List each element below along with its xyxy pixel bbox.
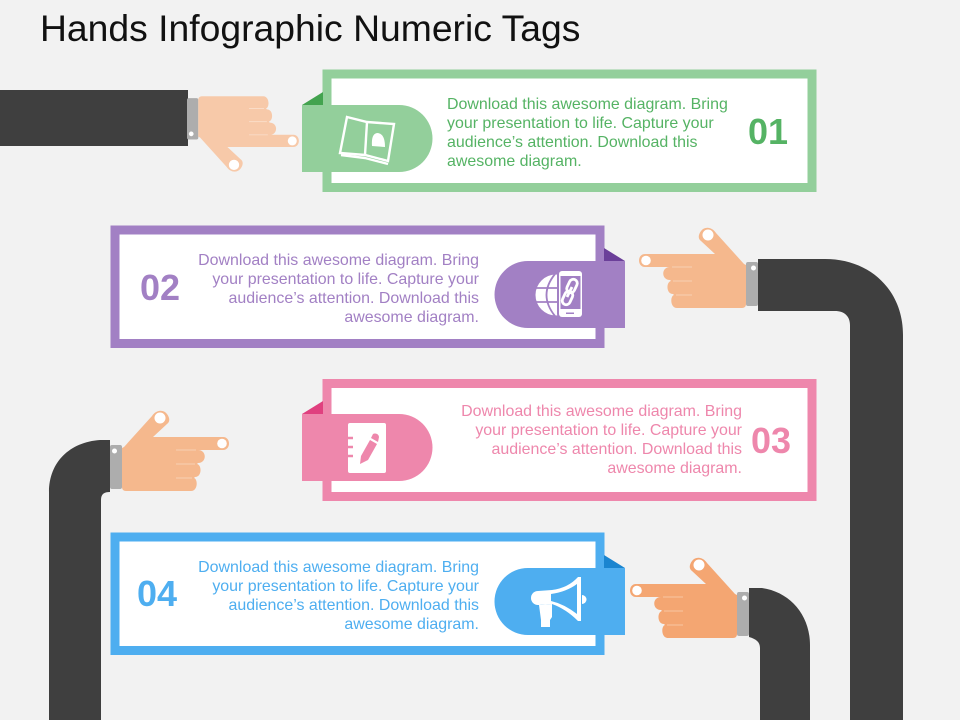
text block 3: Download this awesome diagram. Bring — [461, 403, 742, 420]
number 02: 02 — [140, 267, 180, 308]
text block 1: Download this awesome diagram. Bring — [447, 96, 728, 113]
text block 3: your presentation to life. Capture your — [475, 422, 743, 439]
text block 4: audience’s attention. Download this — [229, 597, 479, 614]
text block 4: Download this awesome diagram. Bring — [198, 559, 479, 576]
text block 1: audience’s attention. Download this — [447, 134, 697, 151]
icon: globe and phone with link — [536, 270, 583, 318]
arm: left tall sleeve — [49, 440, 110, 720]
text block 2: audience’s attention. Download this — [229, 290, 479, 307]
text block 1: your presentation to life. Capture your — [447, 115, 714, 132]
number 01: 01 — [748, 111, 788, 152]
text block 2: Download this awesome diagram. Bring — [198, 252, 479, 269]
hand 3 — [110, 411, 229, 491]
text block 4: your presentation to life. Capture your — [212, 578, 480, 595]
text block 4: awesome diagram. — [344, 616, 479, 633]
tab 2 — [495, 261, 625, 328]
fold 4 — [604, 555, 625, 568]
tab 4 — [494, 568, 625, 635]
icon: megaphone — [531, 577, 586, 627]
panel 3: pink — [302, 384, 812, 496]
text block 1: awesome diagram. — [447, 153, 582, 170]
icon: open book — [340, 117, 394, 164]
panel 2: purple — [115, 230, 625, 344]
fold 3 — [302, 401, 323, 414]
number 04: 04 — [137, 573, 177, 614]
arm: top left sleeve — [0, 90, 188, 146]
hand 1 — [187, 96, 299, 172]
hand 2 — [639, 228, 758, 308]
arm: right tall sleeve — [758, 259, 903, 720]
title: Hands Infographic Numeric Tags — [40, 7, 580, 49]
fold 2 — [604, 248, 625, 261]
hand 4 — [630, 558, 749, 638]
text block 3: audience’s attention. Download this — [492, 441, 742, 458]
text block 3: awesome diagram. — [607, 460, 742, 477]
panel 4: blue — [115, 537, 625, 650]
number 03: 03 — [751, 420, 791, 461]
tab 3 — [302, 414, 432, 481]
panel 1: green — [302, 74, 812, 188]
arm: bottom right sleeve — [749, 588, 810, 720]
text block 2: your presentation to life. Capture your — [212, 271, 480, 288]
icon: notebook and pencil — [346, 423, 386, 473]
tab 1 — [302, 105, 432, 172]
text block 2: awesome diagram. — [344, 309, 479, 326]
fold 1 — [302, 92, 323, 105]
